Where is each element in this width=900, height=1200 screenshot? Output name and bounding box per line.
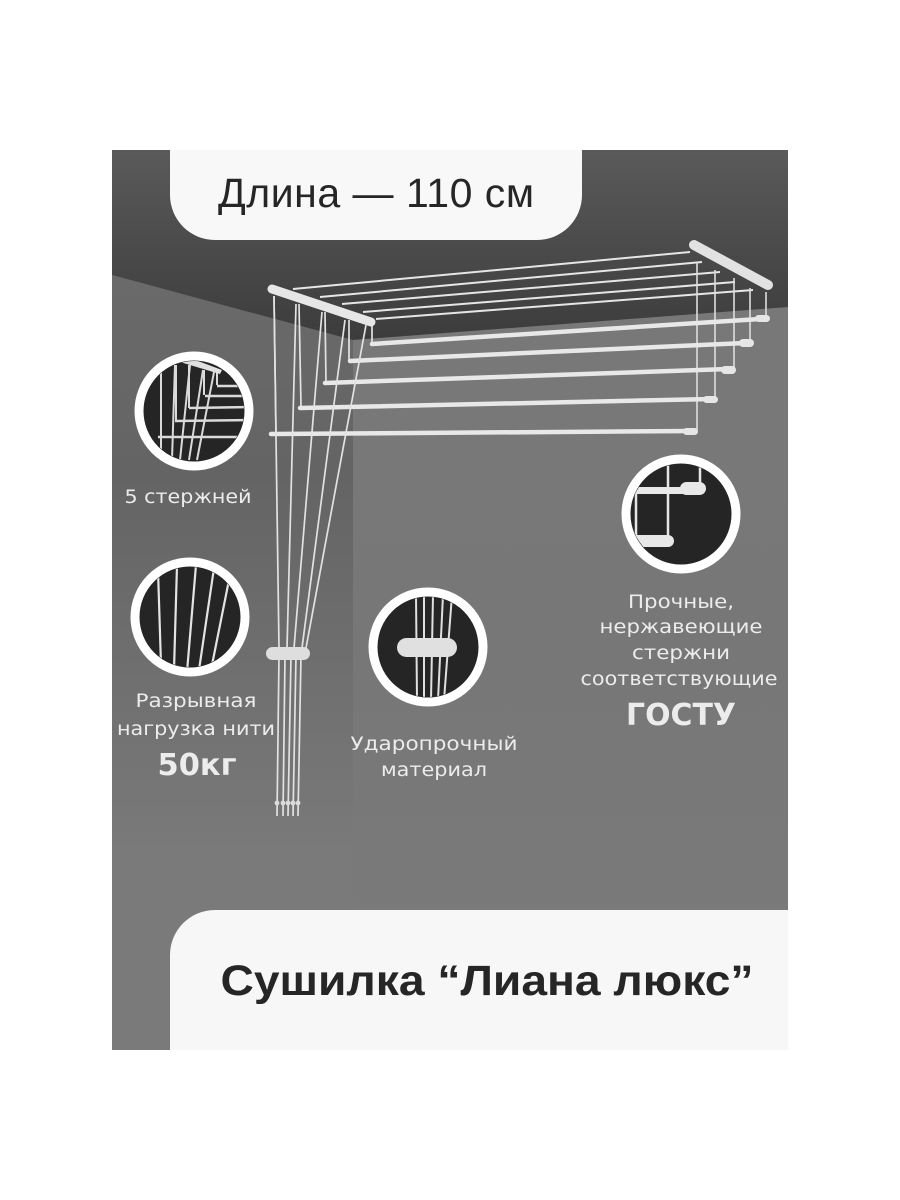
text: GOST rods: нержавеющие: [600, 617, 762, 638]
callout: impact-resistant: [350, 592, 518, 781]
text: impact-resistant: материал: [381, 760, 487, 781]
ceiling bracket left: [272, 289, 371, 322]
text: thread load: Разрывная: [136, 691, 256, 712]
top label: length: [170, 150, 582, 240]
icon: clamp close-up: [373, 592, 483, 702]
text: thread load: [117, 691, 275, 783]
background panel: room: [112, 150, 788, 1050]
text: GOST rods: соответствующие: [580, 669, 778, 690]
cord clamp: [266, 647, 310, 660]
bottom title plate: [170, 910, 788, 1050]
dryer product: [266, 245, 770, 816]
text: GOST rods: стержни: [632, 643, 730, 664]
drying rods: [271, 319, 760, 434]
text: GOST rods: Прочные,: [628, 592, 734, 613]
top label: length: Длина — 110 см: [218, 170, 534, 216]
text: GOST rods: [580, 592, 778, 733]
text: 5 rods: 5 стержней: [124, 487, 252, 508]
cord beads: [275, 801, 300, 805]
text: GOST rods: ГОСТУ: [626, 698, 736, 733]
callout: GOST rods: [580, 459, 778, 733]
rod end caps: [683, 315, 770, 435]
text: impact-resistant: [350, 734, 518, 781]
icon: rod ends close-up: [626, 459, 736, 569]
ceiling bracket right: [694, 245, 768, 285]
bottom title plate: Сушилка “Лиана люкс”: [220, 957, 754, 1005]
left cords: [274, 296, 372, 816]
icon: threads close-up: [135, 562, 245, 672]
callout: thread load: [117, 562, 275, 783]
text: thread load: нагрузка нити: [117, 719, 275, 740]
text: impact-resistant: Ударопрочный: [350, 734, 518, 755]
icon: rods close-up: [139, 356, 250, 466]
text: thread load: 50кг: [158, 748, 236, 783]
right hanging cords: [697, 262, 766, 430]
callout: 5 rods: [124, 356, 252, 508]
ceiling rails: [293, 252, 753, 319]
